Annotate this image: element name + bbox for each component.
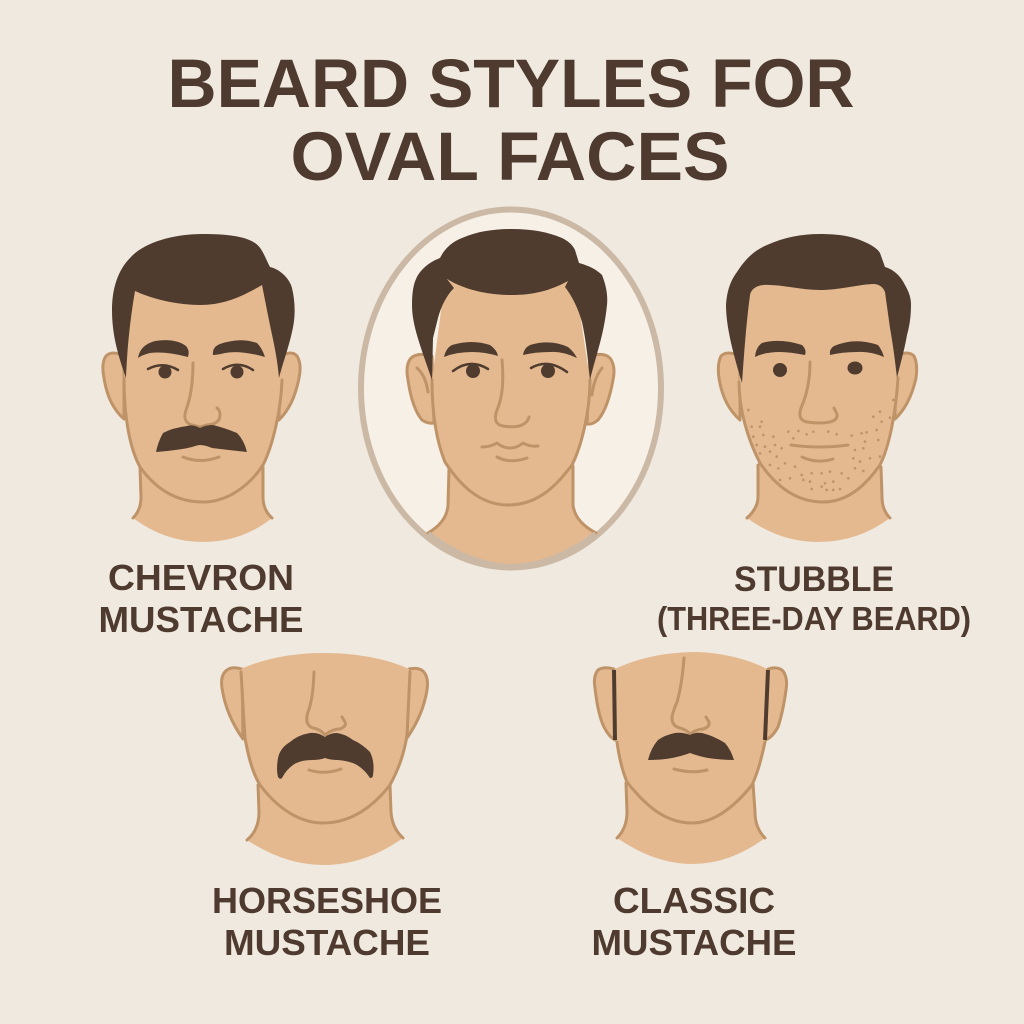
nose <box>185 363 220 427</box>
title <box>168 45 854 195</box>
label: horseshoe mustache: MUSTACHE <box>224 922 430 963</box>
eyes <box>773 363 787 377</box>
neck and shoulders <box>426 464 598 564</box>
mouth <box>482 443 538 461</box>
eyebrows <box>444 342 498 357</box>
portrait: stubble <box>718 234 917 542</box>
title: OVAL FACES <box>290 118 730 195</box>
sideburn bars <box>614 670 768 740</box>
classic mustache <box>648 733 734 760</box>
label: chevron mustache: MUSTACHE <box>98 599 304 640</box>
portrait: chevron mustache <box>103 234 300 542</box>
label: horseshoe mustache: HORSESHOE <box>212 880 442 921</box>
ears <box>407 354 434 423</box>
label: stubble: STUBBLE <box>734 560 894 599</box>
portrait: classic mustache <box>594 652 787 864</box>
nose <box>307 672 345 735</box>
chevron mustache <box>156 425 247 452</box>
label: classic mustache: MUSTACHE <box>592 922 796 963</box>
eyes <box>466 364 480 378</box>
hair <box>412 229 607 380</box>
label: stubble <box>657 560 971 637</box>
title: BEARD STYLES FOR <box>168 45 854 122</box>
eyes <box>158 366 172 378</box>
eyebrows <box>138 340 189 358</box>
label: horseshoe mustache <box>212 880 442 963</box>
horseshoe mustache <box>277 733 374 779</box>
hair <box>112 234 295 378</box>
label: classic mustache <box>592 880 796 963</box>
stubble dots <box>747 399 895 491</box>
oval frame <box>361 210 661 568</box>
label: chevron mustache: CHEVRON <box>108 557 294 598</box>
hair <box>726 234 911 383</box>
portrait: oval face in frame <box>361 210 661 580</box>
nose <box>672 658 709 734</box>
nose <box>495 360 529 427</box>
portrait: horseshoe mustache <box>222 653 428 865</box>
nose <box>800 362 837 423</box>
mouth <box>791 445 848 461</box>
label: classic mustache: CLASSIC <box>613 880 775 921</box>
label: chevron mustache <box>98 557 304 640</box>
label: stubble: (THREE-DAY BEARD) <box>657 600 971 637</box>
face <box>432 280 590 505</box>
eyebrows <box>755 341 806 357</box>
